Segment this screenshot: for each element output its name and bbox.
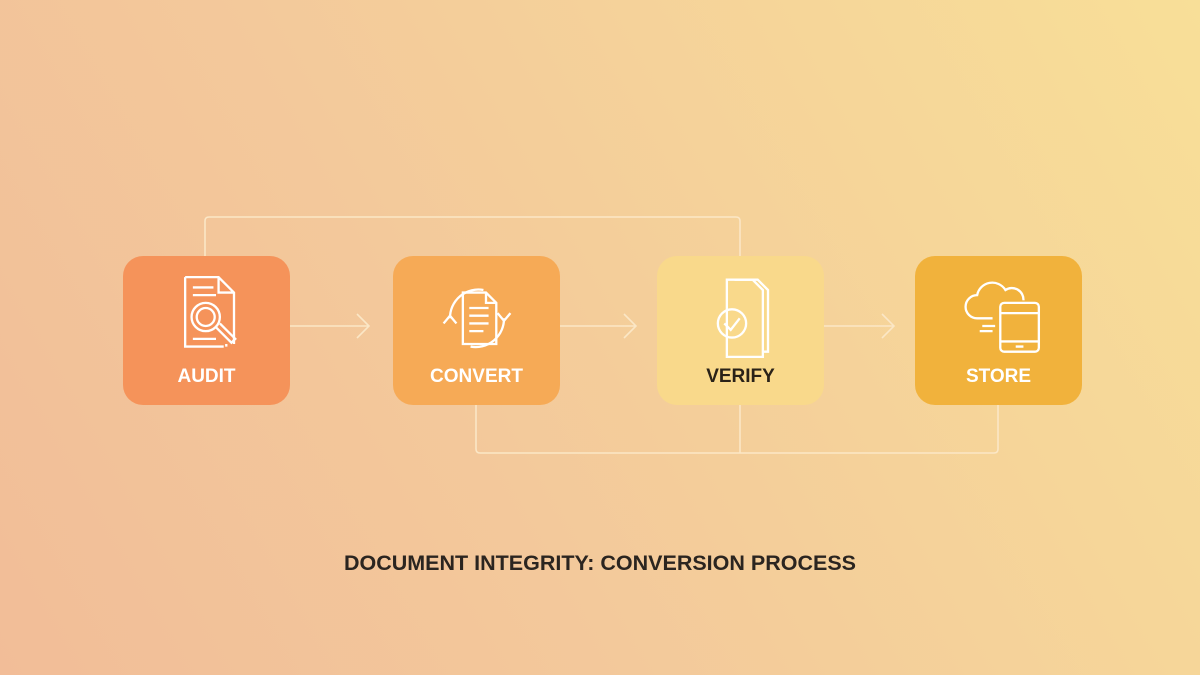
step: audit: AUDIT — [177, 366, 236, 387]
step: convert — [393, 256, 560, 405]
icon: cloud and tablet — [964, 282, 1040, 353]
icon: documents with check — [716, 278, 770, 358]
title: DOCUMENT INTEGRITY: CONVERSION PROCESS — [344, 551, 856, 575]
step: audit — [123, 256, 290, 405]
icon: document with cycle arrows — [442, 288, 512, 348]
step: verify — [657, 256, 824, 405]
step: verify: VERIFY — [706, 366, 775, 387]
step: store — [915, 256, 1082, 405]
step: store: STORE — [966, 366, 1031, 387]
step: convert: CONVERT — [430, 366, 523, 387]
icon: document with magnifier — [184, 276, 237, 348]
